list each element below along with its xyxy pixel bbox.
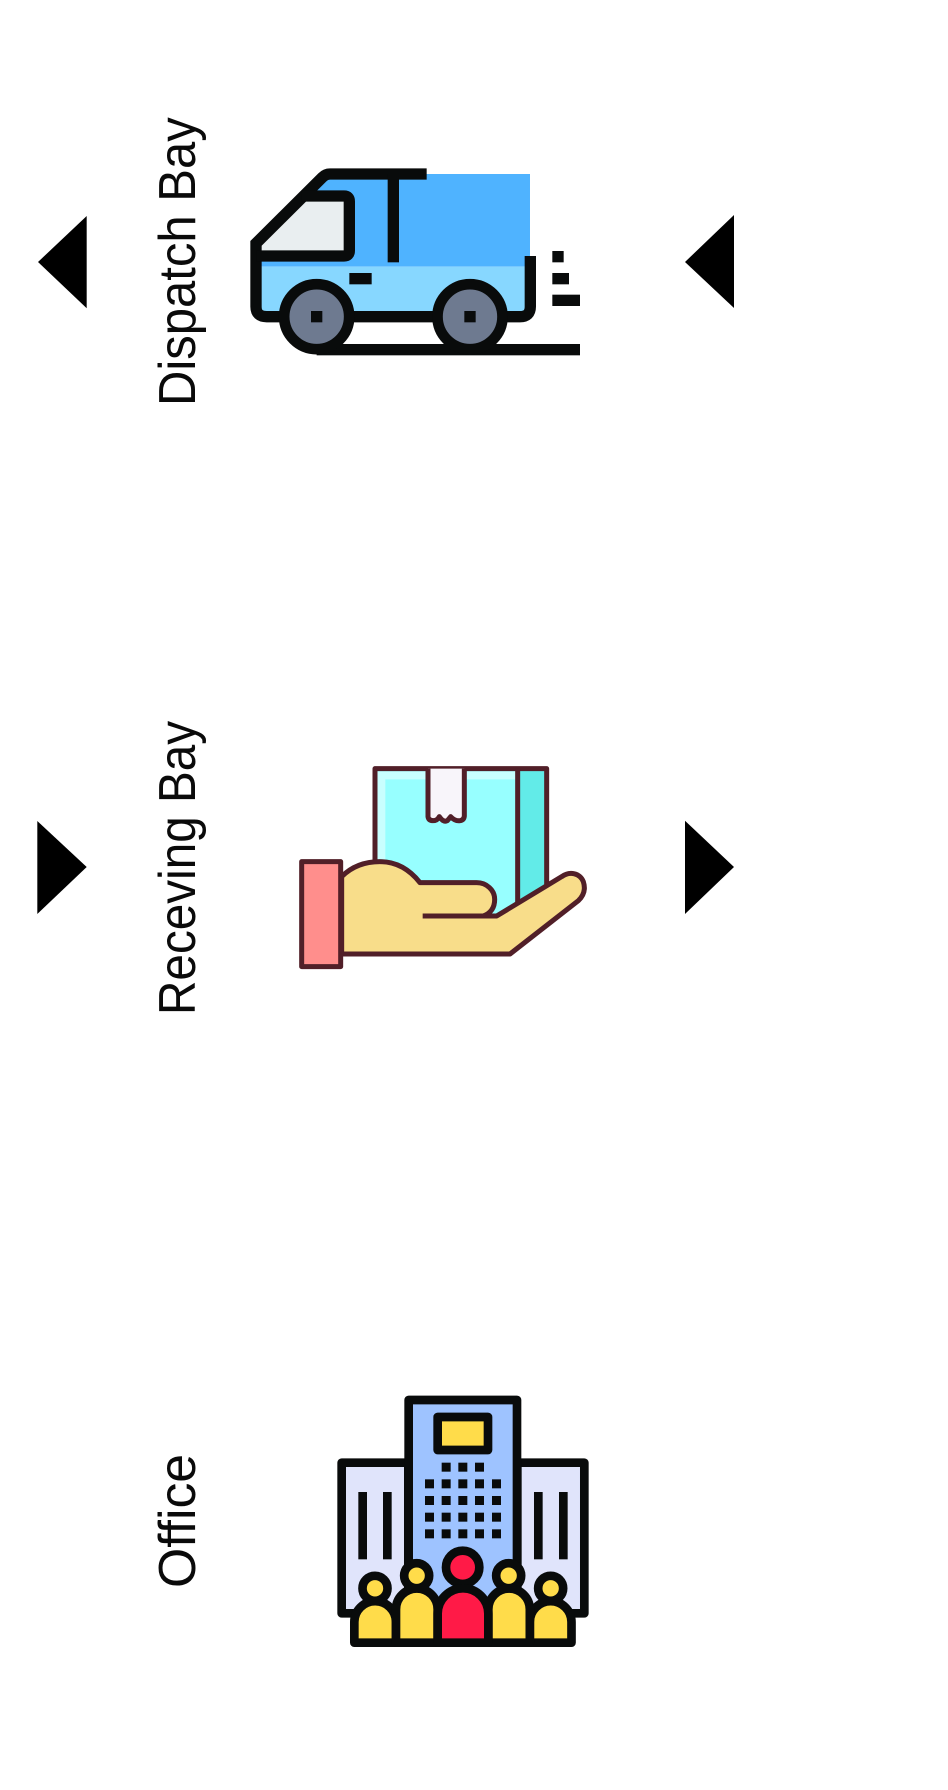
icon: delivery truck	[256, 174, 580, 355]
arrow: receiving left	[37, 821, 87, 914]
arrow: dispatch right	[685, 215, 734, 308]
label: Receving Bay: Receving Bay	[148, 721, 206, 1015]
arrow: dispatch left	[38, 216, 87, 308]
icon: office building with people	[342, 1400, 584, 1643]
icon: hand holding box	[302, 769, 584, 967]
label: Office: Office	[148, 1454, 206, 1588]
arrow: receiving right	[685, 821, 734, 914]
label: Dispatch Bay: Dispatch Bay	[148, 117, 206, 406]
